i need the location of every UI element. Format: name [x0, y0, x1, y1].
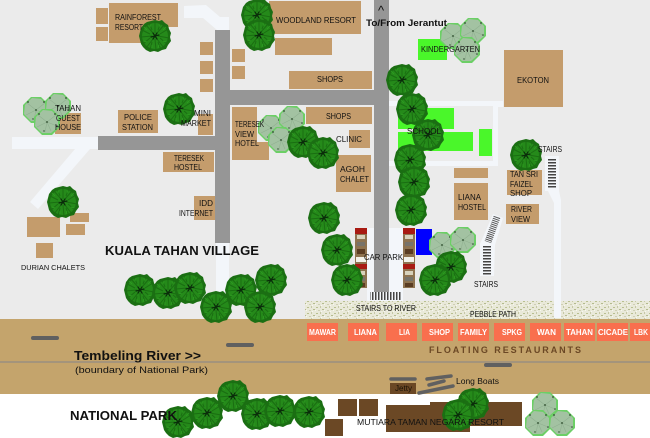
place labels: CLINIC [336, 135, 362, 144]
place labels: MINI [194, 109, 211, 118]
river note: (boundary of National Park) [75, 365, 208, 375]
place labels: TAHAN [55, 104, 81, 113]
place labels: CAR PARK [364, 253, 404, 262]
place labels: VIEW [511, 215, 530, 224]
heading: river: Tembeling River >> [74, 348, 201, 363]
place labels: To/From Jerantut [366, 18, 447, 28]
place labels: TERESEK [235, 120, 265, 129]
place labels: SHOPS [317, 75, 343, 84]
restaurants: SPKG [502, 328, 522, 337]
place labels: RAINFOREST [115, 13, 161, 22]
green school buildings [398, 39, 492, 156]
restaurants: LIA [399, 328, 410, 337]
place labels: STAIRS [538, 145, 562, 154]
place labels: DURIAN CHALETS [21, 263, 85, 272]
place labels: STATION [122, 123, 153, 132]
national park ground [0, 394, 650, 438]
place labels: LIANA [458, 193, 482, 202]
roads [98, 0, 389, 292]
place labels: VIEW [235, 130, 254, 139]
place labels: INTERNET [179, 209, 213, 218]
place labels: RESORT [115, 23, 143, 32]
place labels: STAIRS TO RIVER [356, 304, 416, 313]
parked cars [355, 228, 415, 288]
restaurants: LIANA [354, 328, 377, 337]
pebble path band [305, 301, 650, 320]
boats [33, 338, 510, 393]
place labels: Long Boats [456, 377, 499, 386]
place labels: RIVER [511, 205, 532, 214]
place labels: MARKET [181, 119, 211, 128]
heading: floating restaurants: FLOATING RESTAURANTS [429, 345, 581, 355]
place labels: IDD [199, 199, 213, 208]
place labels: AGOH [340, 165, 365, 174]
restaurants: CICADE [598, 328, 629, 337]
restaurants: FAMILY [460, 328, 488, 337]
pale footpaths [12, 5, 561, 318]
place labels: SHOPS [326, 112, 351, 121]
place labels: SHOP [510, 189, 532, 198]
heading: national park: NATIONAL PARK [70, 408, 178, 423]
place labels: KINDERGARTEN [421, 45, 480, 54]
restaurants [307, 323, 650, 341]
place labels: TAN SRI [510, 170, 538, 179]
river [0, 319, 650, 394]
brown resort buildings [325, 383, 522, 436]
heading: village: KUALA TAHAN VILLAGE [105, 243, 259, 258]
place labels: CHALET [340, 175, 369, 184]
blue block [416, 229, 432, 255]
place labels: TERESEK [174, 154, 205, 163]
place labels: HOUSE [55, 123, 81, 132]
restaurants: TAHAN [566, 328, 593, 337]
place labels: PEBBLE PATH [470, 310, 516, 319]
place labels: SCHOOL [407, 127, 442, 136]
restaurants: WAN [537, 328, 556, 337]
place labels: FAIZEL [510, 180, 533, 189]
place labels: HOTEL [235, 139, 259, 148]
place labels: WOODLAND RESORT [276, 16, 356, 25]
place labels: Jetty [395, 384, 412, 393]
restaurants: LBK [634, 328, 648, 337]
place labels: EKOTON [517, 76, 549, 85]
dark trees [47, 0, 542, 438]
place labels: GUEST [56, 114, 80, 123]
restaurants: SHOP [429, 328, 451, 337]
place labels: MUTIARA TAMAN NEGARA RESORT [357, 417, 504, 427]
restaurants: MAWAR [309, 328, 336, 337]
place labels: POLICE [124, 113, 152, 122]
building blocks [27, 1, 563, 258]
place labels: STAIRS [474, 280, 498, 289]
place labels: HOSTEL [458, 203, 486, 212]
place labels: ^ [378, 3, 385, 18]
place labels: HOSTEL [174, 163, 202, 172]
stairs [370, 158, 556, 300]
